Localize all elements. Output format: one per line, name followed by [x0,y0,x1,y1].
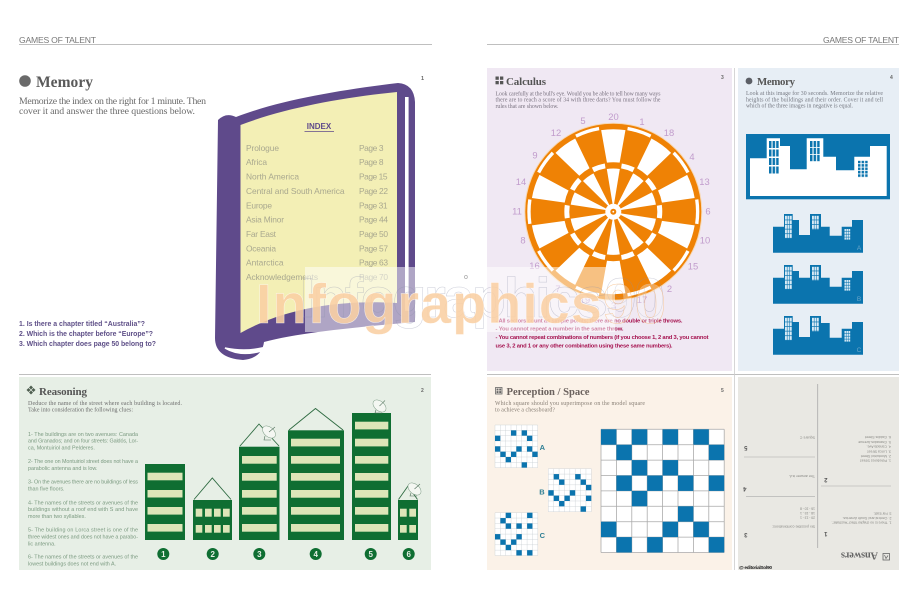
dartboard numbers: 4 [689,151,695,162]
clues list: than five floors. [28,487,65,493]
grid labels: A [540,443,546,452]
panel: perception / space [487,377,732,570]
dartboard numbers: 6 [705,206,711,216]
header: left page: GAMES OF TALENT [19,35,97,45]
dartboard numbers: 18 [664,127,674,138]
answer 2: 6. Galdós Street [865,435,891,439]
index chapter list: Page 22 [359,186,388,196]
building 5: 5 [368,550,373,559]
building 3: 3 [257,550,262,559]
clues list: ca, Montuiriol and Pelderes. [28,445,95,451]
index chapter list: Page 57 [359,244,388,254]
text block: reasoning instructions [28,400,182,414]
dartboard numbers: 14 [516,176,526,187]
dartboard numbers [512,111,711,311]
index chapter list: Oceania [246,244,276,254]
index chapter list: Africa [246,157,267,167]
text block: perception instructions [495,401,645,414]
dartboard numbers: 7 [555,283,561,294]
header: right page: GAMES OF TALENT [823,35,900,45]
skyline option A [773,214,863,253]
page number 5: 5 [721,388,724,394]
dartboard numbers: 2 [667,283,672,294]
skyline option C [773,316,863,355]
dartboard numbers: 8 [520,234,526,246]
panel: reasoning [19,377,431,570]
questions [19,321,156,348]
index chapter list: Page 3 [359,143,384,153]
skyline option C: C [857,347,862,354]
skyline option B [773,265,863,304]
clues list: 3- On the avenues there are no buildings of less [28,480,138,486]
building 1 [145,464,185,560]
answer 2: 2 [824,476,828,482]
building 1: 1 [161,550,166,559]
answer 4: 4 [742,485,746,491]
dartboard [512,111,711,311]
answer 3: Six possible combinations: [772,524,815,528]
skyline option B: B [857,296,861,303]
rules text: use 3, 2 and 1 or any other combination using these same numbers). [496,343,673,349]
answer 2: 3. Lorca Street [867,449,891,453]
answer 3: 18 - 15 - 1 [800,511,815,515]
panel: calculus [487,68,732,371]
heading: memory: Memory [757,76,796,88]
page number 2: 2 [421,388,424,394]
answer 2 [824,435,891,482]
text block: calculus instructions: there are to reach a score of 34 with three darts? You must follow the [496,97,661,104]
dartboard numbers: 16 [529,260,540,271]
building 3 [239,424,280,560]
text block: memory instructions: cover it and answer the three questions below. [19,106,195,117]
watermark: o [464,274,468,281]
answer 4: The answer is A [789,474,815,478]
heading: reasoning: Reasoning [39,386,88,398]
text block: memory instructions [19,96,206,117]
building 2: 2 [210,550,215,559]
index chapter list: Page 50 [359,229,388,239]
text block: perception instructions: Which square should you superimpose on the model square [495,401,645,407]
answer 1: 2. Central and South America. [842,516,892,520]
dartboard numbers: 3 [611,300,616,311]
small grid B [548,469,591,512]
dartboard numbers: 13 [699,176,710,187]
index chapter list: Page 15 [359,172,388,182]
building 6: 6 [406,550,411,559]
clues list: 1- The buildings are on two avenues: Canada [28,432,138,438]
answer 2: 1. Pelederes Street [860,458,891,462]
dartboard numbers: 5 [580,115,586,126]
answer 5: Square C [799,436,815,440]
index chapter list: Page 8 [359,157,384,167]
model skyline [746,134,890,199]
dartboard numbers: 15 [688,260,698,272]
text block: memory instructions: Memorize the index on the right for 1 minute. Then [19,96,206,107]
heading: memory: Memory [36,74,93,91]
building 6 [398,481,423,560]
answer 1: 1. There is no chapter titled “Australia”. [832,520,892,524]
rules text: - You cannot repeat a number in the same throw. [496,326,624,332]
watermark: Infographics90 [300,266,665,329]
index chapter list: Page 63 [359,258,388,268]
answer 5 [744,436,815,450]
rules text: - You cannot repeat combinations of numbers (if you choose 1, 2 and 3, you cannot [496,335,709,341]
dartboard numbers: 19 [580,294,590,305]
answer 1 [824,512,892,536]
answer 3: 20 - 13 - 1 [800,516,815,520]
heading: calculus: Calculus [506,76,547,88]
credit: @ editorialSol90 [739,565,772,571]
small grid A [495,425,538,468]
skyline option A: A [857,245,862,252]
grid labels: C [540,531,546,540]
text block: skyline instructions: Look at this image for 30 seconds. Memorize the relative [746,90,883,97]
watermark: Infographics90 [256,272,666,335]
index chapter list [246,143,388,282]
dartboard numbers: 20 [608,111,619,122]
answer 4 [742,474,815,491]
index chapter list: Prologue [246,143,279,153]
clues list [28,432,138,568]
model grid [601,429,724,552]
dartboard numbers: 9 [532,150,538,160]
text block: reasoning instructions: Deduce the name of the street where each building is located. [28,400,182,407]
page number 4: 4 [890,75,893,81]
text block: skyline instructions [746,90,883,110]
rules text [496,318,709,349]
answer 1: 1 [824,530,828,536]
book illustration [215,83,415,360]
answer 2: 4. Canada Ave. [866,444,891,448]
building 5 [352,398,391,560]
text block: perception instructions: to achieve a chessboard? [495,408,555,414]
questions: 2. Which is the chapter before “Europe”? [19,331,153,338]
clues list: lowest buildings does not end with A. [28,562,116,568]
building 4 [288,408,344,560]
answer 3: 16 - 10 - 8 [800,506,815,510]
page number 1: 1 [421,76,424,82]
clues list: 4- The names of the streets or avenues of the [28,500,138,506]
index chapter list: Antarctica [246,258,284,268]
small grid C [495,513,538,556]
page number 3: 3 [721,75,724,81]
text block: calculus instructions [496,90,661,110]
panel: memory index [19,74,424,360]
answer 2: 2. Montuiriol Street [861,454,891,458]
index chapter list: North America [246,172,299,182]
dartboard numbers: 11 [512,206,522,216]
heading: answers: Answers [841,550,878,560]
grid labels: B [539,488,545,496]
index chapter list: Acknowledgements [246,272,318,282]
clues list: 2- The one on Montuiriol street does not have a [28,459,138,465]
clues list: three widest ones and does not have a parabo- [28,534,138,540]
clues list: lic antenna. [28,541,56,547]
index chapter list: Central and South America [246,186,345,196]
clues list: and Granados; and on four streets: Galdós, Lor- [28,439,138,445]
panel: memory skyline [738,68,899,371]
answer 5: 5 [744,444,748,450]
heading: perception: Perception / Space [506,387,590,398]
text block: reasoning instructions: Take into consideration the following clues: [28,406,133,414]
building 4: 4 [313,550,318,559]
text block: skyline instructions: which of the three images in negative is equal. [746,103,854,110]
questions: 3. Which chapter does page 50 belong to? [19,341,156,348]
dartboard numbers: 1 [639,116,645,127]
index heading: INDEX [307,122,332,131]
clues list: buildings without a roof end with S and have [28,507,138,513]
index chapter list: Asia Minor [246,214,284,224]
questions: 1. Is there a chapter titled “Australia”? [19,321,145,328]
answer 1: 3. Far East. [874,512,892,516]
building 2 [193,478,232,560]
text block: calculus instructions: rules that are shown below. [496,104,559,110]
clues list: more than two syllables. [28,514,86,520]
index chapter list: Page 44 [359,214,388,224]
clues list: 6- The names of the streets or avenues of the [28,555,138,561]
clues list: parabolic antenna and is low. [28,466,98,472]
answer 2: 5. Granados Avenue [858,440,891,444]
index chapter list: Far East [246,229,277,239]
grid labels [539,443,546,540]
text block: skyline instructions: heights of the buildings and their order. Cover it and tell [746,96,883,103]
answer 3 [744,506,815,537]
rules text: - All sectors count as simple points; there are no double or triple throws. [496,318,683,324]
panel: answers (upside down) [738,377,899,571]
index chapter list: Page 31 [359,200,388,210]
dartboard numbers: 10 [700,234,710,246]
text block: calculus instructions: Look carefully at the bull's eye. Would you be able to tell how many ways [496,90,661,98]
answer 3: 3 [744,531,748,537]
clues list: 5- The building on Lorca street is one of the [28,528,138,534]
index chapter list: Page 70 [359,272,388,282]
dartboard numbers: 17 [637,294,647,305]
index chapter list: Europe [246,200,272,210]
dartboard numbers: 12 [551,127,561,138]
